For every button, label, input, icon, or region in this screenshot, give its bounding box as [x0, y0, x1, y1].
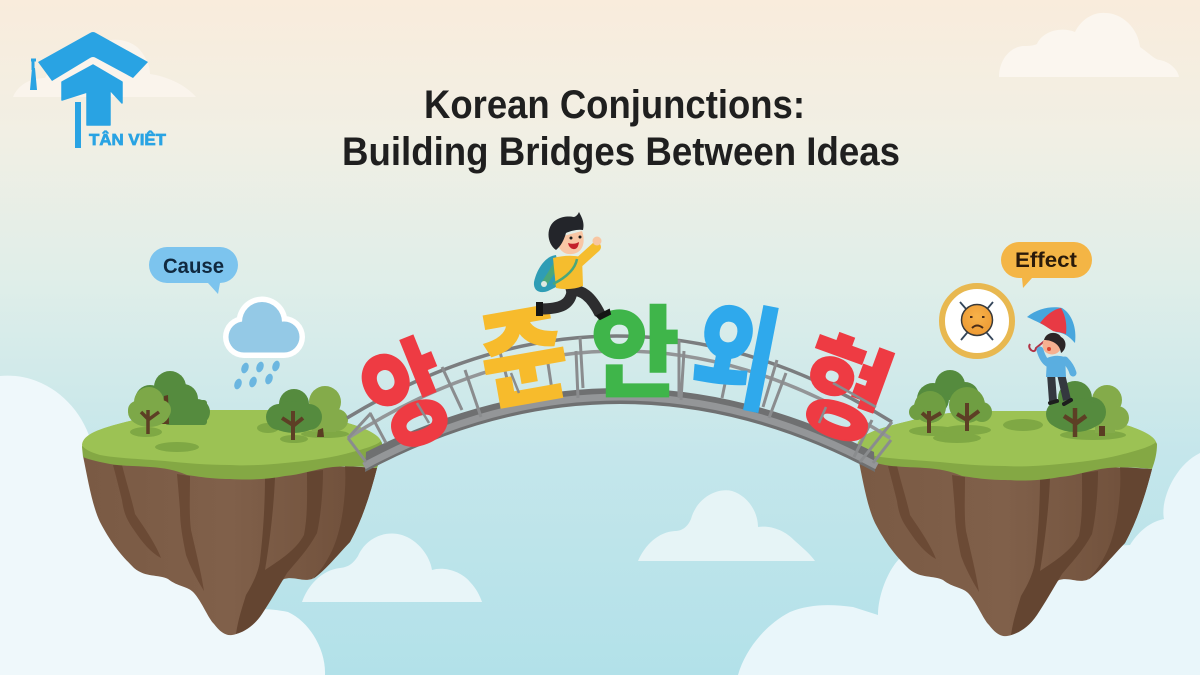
rain cloud white outline [223, 296, 305, 358]
man arms [1040, 350, 1073, 373]
effect bubble shape [1001, 242, 1092, 288]
right light crowns [909, 387, 992, 423]
torso [553, 256, 583, 289]
icon: rain cloud [223, 296, 305, 390]
letter 형: 형 [781, 320, 905, 463]
cause bubble shape [149, 247, 238, 294]
small stump [161, 395, 169, 424]
umbrella canopy [1027, 307, 1075, 343]
light tree trunk [141, 410, 159, 434]
face [556, 231, 584, 254]
mouth [568, 242, 579, 249]
cloud: large bottom left [0, 376, 325, 675]
far-right stump [1099, 426, 1105, 436]
cause label: Cause [163, 255, 224, 278]
cuff [541, 281, 547, 287]
arched hangul letters [348, 289, 905, 471]
bridge deck edge [364, 397, 877, 466]
far-right trunk [1064, 408, 1086, 437]
man hair [1044, 333, 1066, 353]
cloud: top left behind logo [13, 40, 196, 97]
face limbs [960, 302, 993, 340]
title line 1: Korean Conjunctions: [424, 83, 805, 127]
far-right dark tree [1046, 381, 1106, 432]
front shoe [597, 310, 610, 319]
face badge [942, 286, 1012, 356]
logo tassel body [30, 68, 37, 90]
right dark bush [917, 370, 979, 415]
cloud: middle centre [638, 490, 815, 561]
letter 준: 준 [471, 294, 577, 424]
far-right light bush [1092, 385, 1129, 433]
umbrella red panel [1040, 308, 1066, 334]
letter 외: 외 [682, 289, 787, 427]
rain cloud body [228, 302, 300, 352]
effect speech bubble [1001, 242, 1092, 288]
person with umbrella [1027, 307, 1075, 404]
rain drops [233, 360, 281, 390]
front leg [566, 290, 600, 314]
backpack [534, 255, 562, 292]
right ground shadows [909, 419, 1126, 443]
cloud: large bottom right [738, 453, 1200, 675]
logo wordmark: TÂN VIÊT [89, 130, 166, 149]
letter 앙: 앙 [348, 325, 469, 471]
letter 안: 안 [591, 298, 679, 410]
man shoes [1050, 400, 1071, 404]
logo cap [38, 32, 148, 81]
logo pole [75, 102, 81, 148]
umbrella handle [1029, 334, 1053, 351]
running boy with backpack [534, 212, 610, 319]
raised arm [576, 247, 596, 265]
effect label: Effect [1015, 249, 1077, 272]
right floating island [857, 411, 1157, 636]
back foot [536, 302, 543, 316]
man head [1042, 336, 1062, 354]
logo tassel [31, 60, 36, 70]
far arm [544, 262, 558, 284]
trunk right [282, 411, 303, 440]
man mouth [1047, 347, 1051, 351]
hand [592, 236, 602, 246]
icon: sad face circle [942, 286, 1012, 356]
logo arrow [62, 65, 122, 125]
face [962, 304, 992, 336]
left floating island [82, 410, 382, 635]
stump right [317, 428, 324, 437]
rail fragments in front of letters [417, 373, 876, 423]
hair [548, 212, 584, 250]
bridge [347, 336, 892, 472]
cause speech bubble [149, 247, 238, 294]
cloud: top right [999, 13, 1179, 77]
dark bush [135, 371, 210, 425]
bridge deck top [365, 388, 875, 472]
dark tree right [266, 389, 322, 433]
cloud: middle left [302, 534, 482, 602]
right island trees [909, 370, 1129, 443]
bridge lower rail [348, 351, 890, 438]
ground shadows [130, 423, 349, 452]
satchel strap [553, 259, 577, 284]
right trunks [922, 403, 979, 433]
eye 2 [578, 236, 582, 238]
back leg [540, 292, 572, 309]
face eyes and mouth [970, 317, 984, 328]
man legs [1051, 374, 1067, 401]
left island trees [128, 371, 349, 452]
eyes [570, 236, 572, 240]
title [342, 83, 900, 174]
light bush right [309, 386, 348, 432]
light tree [128, 387, 171, 427]
bridge posts [348, 337, 892, 463]
bridge top rail [347, 336, 892, 422]
man torso [1046, 356, 1066, 377]
logo: Tân Việt [30, 32, 166, 149]
title line 2: Building Bridges Between Ideas [342, 130, 900, 174]
